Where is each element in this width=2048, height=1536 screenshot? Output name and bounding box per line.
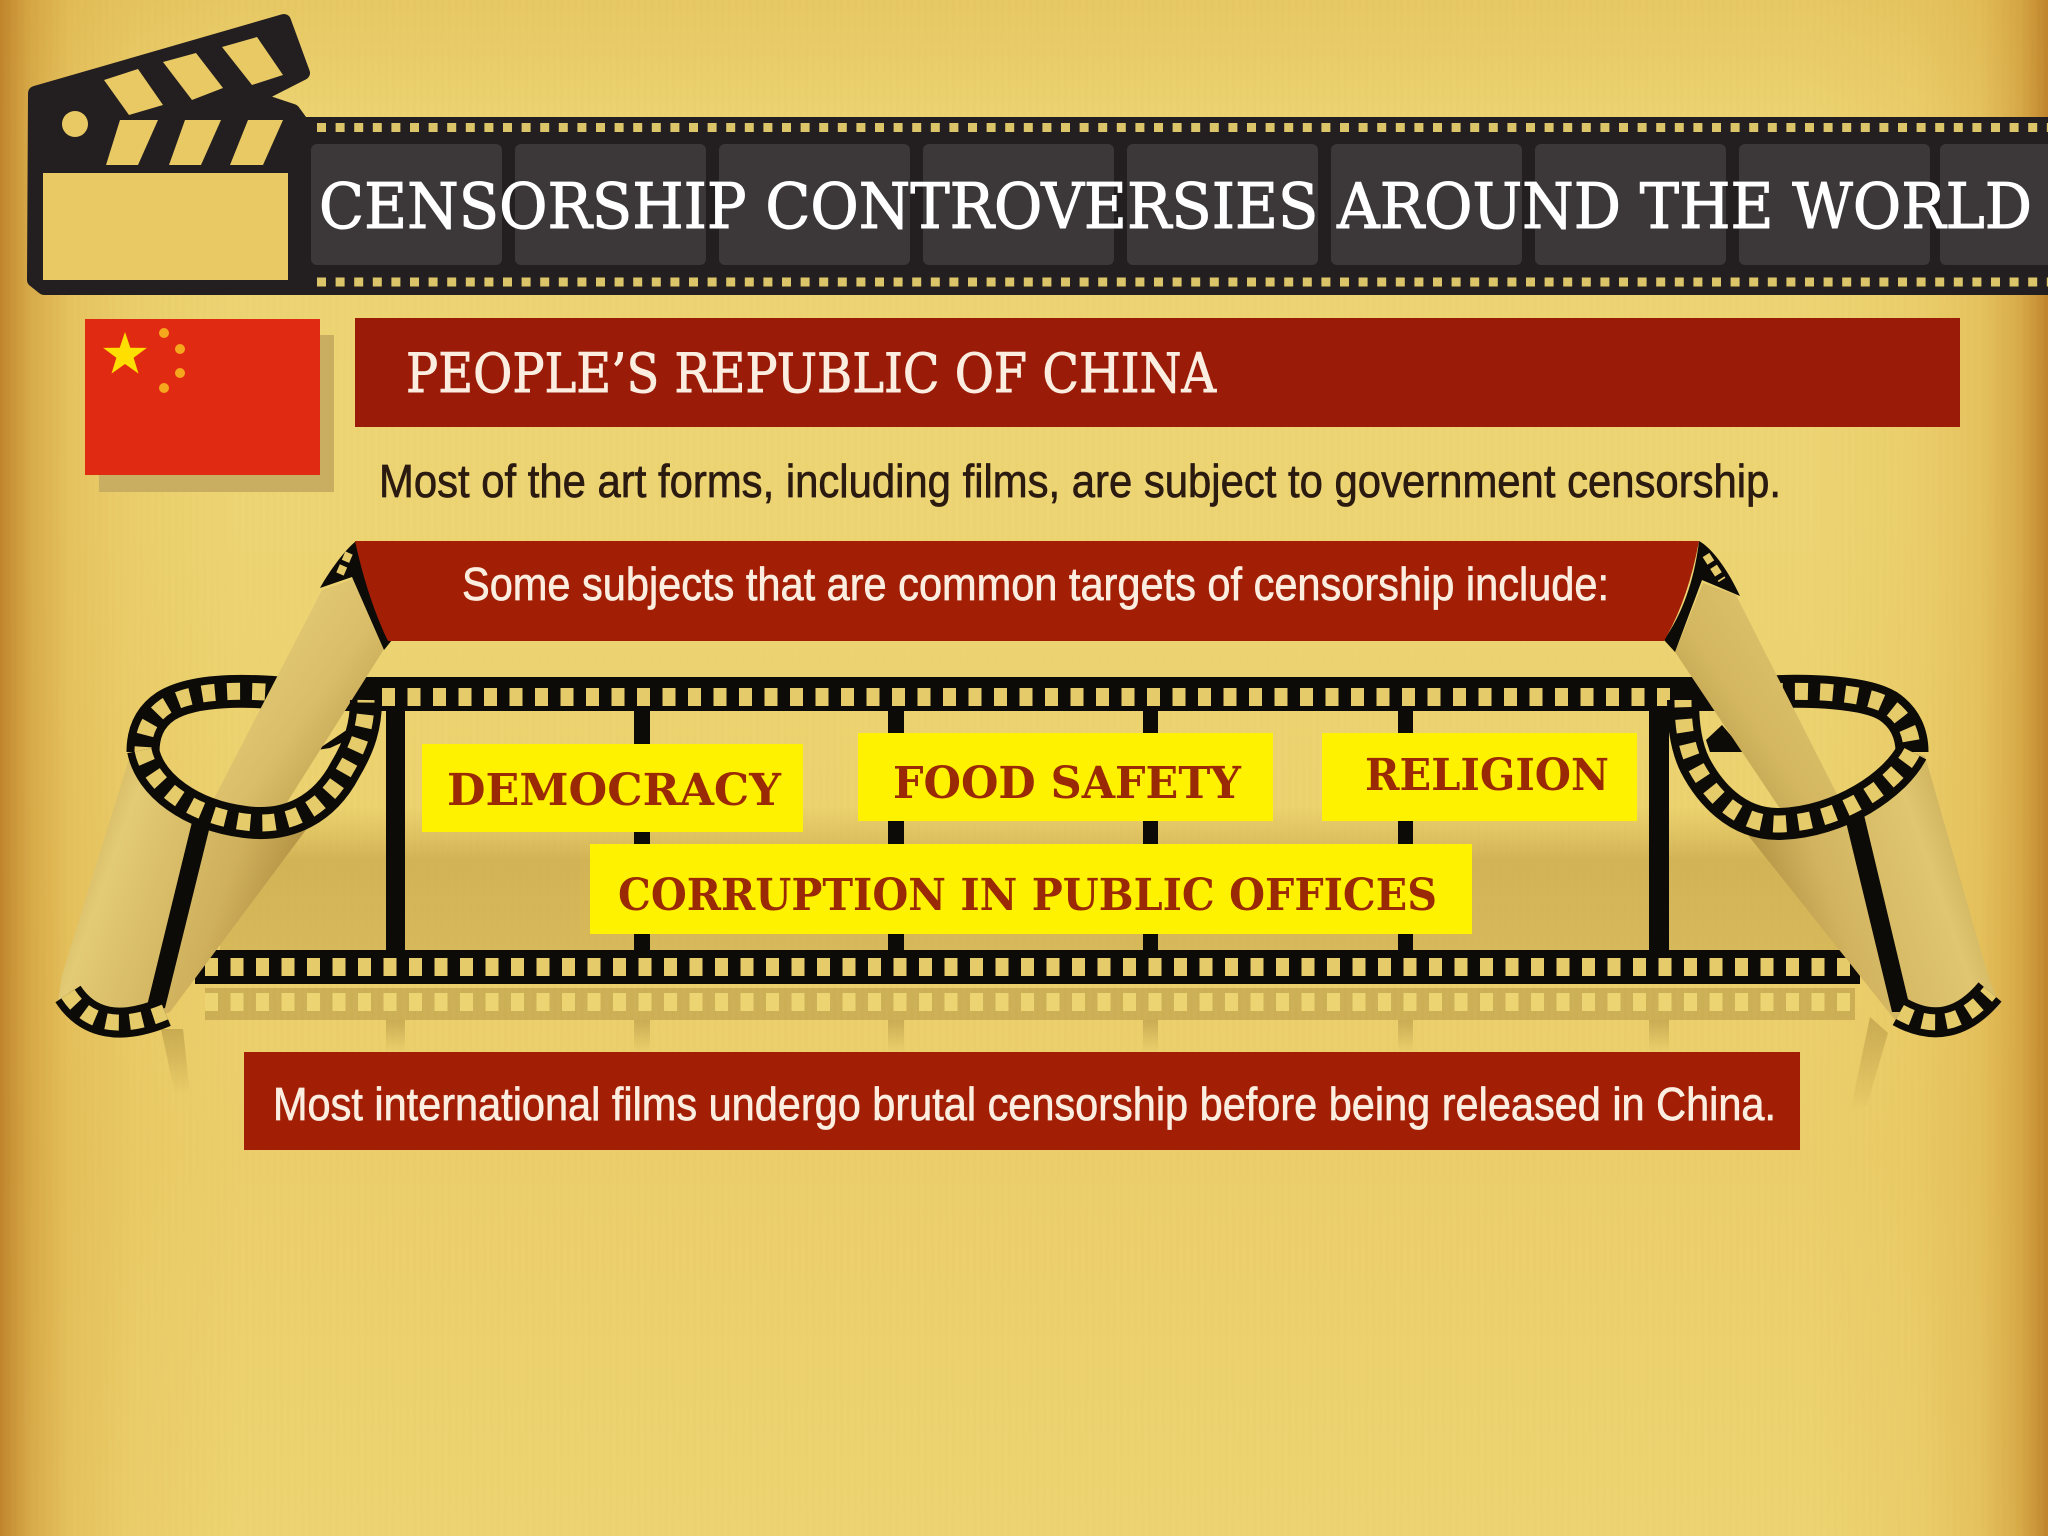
country heading: PEOPLE’S REPUBLIC OF CHINA: [406, 342, 1217, 405]
right film roll: [1664, 541, 2000, 1030]
tag: religion: RELIGION: [1365, 750, 1609, 801]
callout: international films: Most international films undergo brutal censorship before being released in China.: [273, 1078, 1776, 1130]
header film strip: [296, 117, 2048, 295]
tag: corruption in public offices: CORRUPTION IN PUBLIC OFFICES: [618, 870, 1437, 921]
tag: democracy: [422, 744, 803, 832]
tag: food safety: [858, 733, 1273, 821]
icon: China flag: [85, 319, 334, 492]
tag: food safety: FOOD SAFETY: [893, 758, 1242, 809]
left film roll: [58, 541, 392, 1024]
banner: common targets: [355, 541, 1699, 641]
icon: film clapperboard: [34, 21, 303, 288]
main film strip: [195, 677, 1860, 984]
country heading: [355, 318, 1960, 427]
tag: corruption in public offices: [590, 844, 1472, 934]
banner: common targets: Some subjects that are common targets of censorship include:: [462, 558, 1609, 610]
callout: international films: [244, 1052, 1800, 1150]
film strip reflection: [161, 988, 1888, 1113]
tag: religion: [1322, 733, 1637, 821]
loop back bands: [143, 691, 1912, 752]
tag: democracy: DEMOCRACY: [447, 765, 782, 816]
text: government censorship statement: Most of the art forms, including films, are subject to government censorship.: [379, 455, 1781, 507]
